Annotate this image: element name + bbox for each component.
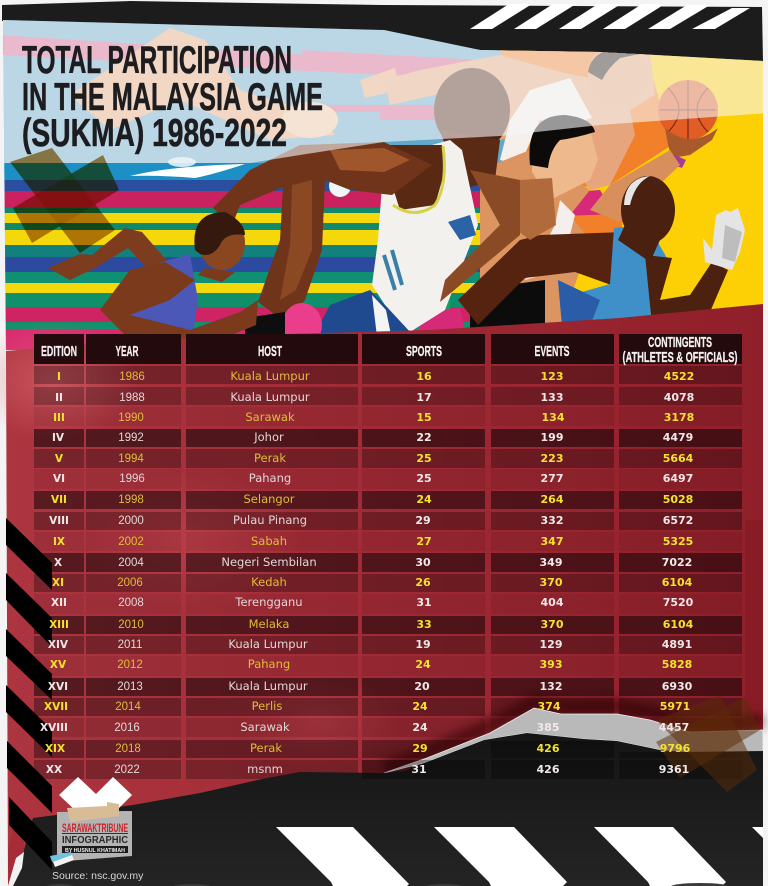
row XVII: XVII (44, 701, 68, 713)
panel: bottom clapperboard (8, 733, 763, 886)
row I: I (57, 371, 61, 383)
row VII: 264 (541, 493, 564, 506)
title: (SUKMA) 1986-2022 (22, 112, 287, 155)
row X: 7022 (662, 556, 692, 569)
row XIX (45, 741, 691, 755)
row XII: XII (51, 597, 67, 609)
title: IN THE MALAYSIA GAME (22, 76, 323, 119)
row I: 1986 (119, 371, 145, 383)
row XX: 2022 (114, 764, 140, 776)
row XX: 9361 (659, 763, 689, 776)
row XIII: 33 (416, 618, 432, 631)
row XIX: Perak (250, 741, 282, 755)
row XIV: 129 (540, 638, 562, 651)
row XVII: 374 (538, 700, 561, 713)
row IV (52, 430, 693, 444)
row III: III (53, 412, 65, 424)
row I: 123 (541, 370, 563, 383)
row XIII: 370 (541, 618, 564, 631)
row XIX: 2018 (115, 743, 141, 755)
row II: 133 (541, 391, 563, 404)
icon: chevron stripes (276, 827, 763, 886)
row XVIII: XVIII (40, 722, 68, 734)
row XVI (48, 679, 693, 693)
row XX: 31 (411, 763, 427, 776)
row XI: 2006 (117, 577, 143, 589)
faint table cells on black (362, 741, 742, 779)
row VII (51, 492, 693, 506)
shadow above torn paper (384, 702, 763, 768)
row XVII (44, 699, 690, 713)
row X: X (54, 557, 62, 569)
row II (55, 390, 694, 404)
row XIV: 4891 (662, 638, 692, 651)
row VIII: 332 (541, 514, 563, 527)
logo: Sarawak Tribune infographic (50, 777, 132, 867)
row VII: 5028 (663, 493, 693, 506)
row IV: 4479 (663, 431, 693, 444)
fourth athlete: blue tank (440, 170, 745, 326)
row XI: 370 (540, 576, 563, 589)
row XIV: Kuala Lumpur (228, 637, 308, 651)
row XII: Terengganu (234, 595, 303, 609)
row XI: 6104 (662, 576, 693, 589)
row I: 4522 (664, 370, 694, 383)
row VIII: Pulau Pinang (233, 513, 307, 527)
row X: Negeri Sembilan (221, 555, 317, 569)
tape: top left (10, 148, 119, 253)
row XVIII: Sarawak (240, 720, 290, 734)
row XVI: 2013 (117, 681, 143, 693)
jumping basketball player (384, 45, 655, 190)
row XVIII: 2016 (114, 722, 140, 734)
row VIII: 2000 (118, 515, 144, 527)
yellow and orange panels (500, 50, 763, 335)
row XVII: 5971 (660, 700, 690, 713)
row V: 223 (541, 452, 563, 465)
row II: II (55, 392, 63, 404)
row XVII: 24 (412, 700, 428, 713)
row XIV (48, 637, 692, 651)
row III: 15 (416, 411, 432, 424)
title (22, 39, 323, 155)
row VII: VII (51, 494, 67, 506)
row VI: 1996 (119, 473, 145, 485)
row II: 1988 (119, 392, 145, 404)
row II: Kuala Lumpur (230, 390, 310, 404)
row III: 3178 (664, 411, 694, 424)
row XII (51, 595, 694, 609)
row XIV: XIV (48, 639, 69, 651)
row XVI: XVI (48, 681, 68, 693)
table header: CONTINGENTS (648, 334, 712, 351)
row XV: 393 (540, 658, 562, 671)
row XX (46, 762, 689, 776)
row VIII: 29 (415, 514, 431, 527)
row VIII: 6572 (663, 514, 693, 527)
row V (55, 451, 694, 465)
row II: 4078 (664, 391, 694, 404)
row XVII: Perlis (252, 699, 282, 713)
row VI (53, 471, 693, 485)
row XIII: 6104 (663, 618, 694, 631)
row I: Kuala Lumpur (230, 369, 310, 383)
table cell backgrounds (34, 334, 742, 779)
translucent white wash behind title (0, 20, 768, 163)
table header: EVENTS (534, 343, 570, 360)
water splash (130, 157, 351, 197)
torn grey paper edge (384, 708, 763, 773)
row XII: 2008 (118, 597, 144, 609)
row VII: 24 (416, 493, 432, 506)
woman runner (48, 212, 258, 348)
row XX: XX (46, 764, 62, 776)
row XV: 24 (415, 658, 431, 671)
row IV: 199 (541, 431, 563, 444)
table (40, 334, 738, 776)
row IX: 347 (541, 535, 563, 548)
row VI: 277 (541, 472, 563, 485)
row XV: 5828 (662, 658, 692, 671)
icon: clapper stripes (470, 4, 750, 29)
row XVIII: 385 (537, 721, 559, 734)
row II: 17 (416, 391, 432, 404)
row III (53, 410, 694, 424)
row XV: Pahang (248, 657, 290, 671)
row I: 16 (416, 370, 432, 383)
background stripes (3, 35, 579, 350)
row XVIII (40, 720, 689, 734)
row XV: 2012 (117, 659, 143, 671)
row XII: 7520 (663, 596, 694, 609)
title: TOTAL PARTICIPATION (22, 39, 292, 82)
centre runner (213, 68, 510, 350)
row V: V (55, 453, 64, 465)
row X (54, 555, 692, 569)
source text: Source: nsc.gov.my (52, 870, 144, 882)
row IV: 22 (416, 431, 432, 444)
logo: Sarawak Tribune infographic: SARAWAKTRIBUNE (62, 821, 128, 835)
row I (57, 369, 694, 383)
row XIX: 426 (537, 742, 560, 755)
row X: 30 (415, 556, 431, 569)
row XIV: 19 (415, 638, 431, 651)
row IX: 2002 (118, 536, 144, 548)
basketball and hand (590, 80, 718, 222)
row XV: XV (50, 659, 67, 671)
table header: HOST (258, 343, 282, 360)
row XIX: 9796 (660, 742, 691, 755)
row XVIII: 4457 (659, 721, 689, 734)
row III: 1990 (118, 412, 144, 424)
logo: Sarawak Tribune infographic: INFOGRAPHIC (62, 835, 128, 846)
row VII: 1998 (118, 494, 144, 506)
row XIII: XIII (49, 619, 69, 631)
row XIX: XIX (45, 743, 65, 755)
row XIX: 29 (412, 742, 428, 755)
row XIII (49, 617, 694, 631)
row XVI: Kuala Lumpur (228, 679, 308, 693)
row IV: Johor (253, 430, 284, 444)
panel: red table background (6, 304, 763, 886)
row XVI: 6930 (662, 680, 693, 693)
logo: Sarawak Tribune infographic: BY HUSNUL KHATIMAH (65, 848, 125, 854)
black diagonal stripes (6, 518, 52, 870)
header cells (34, 334, 742, 364)
row XII: 404 (541, 596, 564, 609)
row V: Perak (254, 451, 286, 465)
table header (41, 334, 738, 366)
third athlete (418, 115, 598, 340)
row XVI: 20 (414, 680, 430, 693)
row VI: VI (53, 473, 65, 485)
row X: 349 (540, 556, 562, 569)
row XIII: 2010 (118, 619, 144, 631)
row V: 25 (416, 452, 432, 465)
row XI: XI (52, 577, 64, 589)
row XII: 31 (416, 596, 432, 609)
row V: 1994 (118, 453, 144, 465)
row XVII: 2014 (115, 701, 141, 713)
row XI (52, 575, 693, 589)
row VII: Selangor (244, 492, 295, 506)
row XIII: Melaka (249, 617, 289, 631)
tape: bottom right (656, 695, 760, 792)
row VI: Pahang (249, 471, 291, 485)
row XI: 26 (415, 576, 431, 589)
row XI: Kedah (251, 575, 287, 589)
table header: YEAR (116, 343, 139, 360)
red panel highlights (0, 320, 763, 770)
row XV (50, 657, 692, 671)
row XVIII: 24 (412, 721, 428, 734)
row IX: Sabah (251, 534, 287, 548)
row VI: 25 (416, 472, 432, 485)
row IX: 5325 (663, 535, 693, 548)
row IV: 1992 (118, 432, 144, 444)
row VIII: VIII (49, 515, 69, 527)
swimmer (70, 28, 400, 140)
row III: Sarawak (245, 410, 295, 424)
illustration: athletes over striped background (0, 20, 768, 350)
row XIV: 2011 (118, 639, 142, 651)
row IX (53, 534, 693, 548)
row VI: 6497 (663, 472, 693, 485)
row IV: IV (52, 432, 65, 444)
row XX: 426 (537, 763, 560, 776)
row XVI: 132 (540, 680, 562, 693)
table header: EDITION (41, 343, 77, 360)
row X: 2004 (118, 557, 144, 569)
row III: 134 (542, 411, 565, 424)
row VIII (49, 513, 693, 527)
row IX: IX (53, 536, 65, 548)
row V: 5664 (663, 452, 694, 465)
table header: SPORTS (406, 343, 442, 360)
top clapperboard band (2, 1, 763, 62)
row XX: msnm (247, 762, 283, 776)
row IX: 27 (416, 535, 432, 548)
